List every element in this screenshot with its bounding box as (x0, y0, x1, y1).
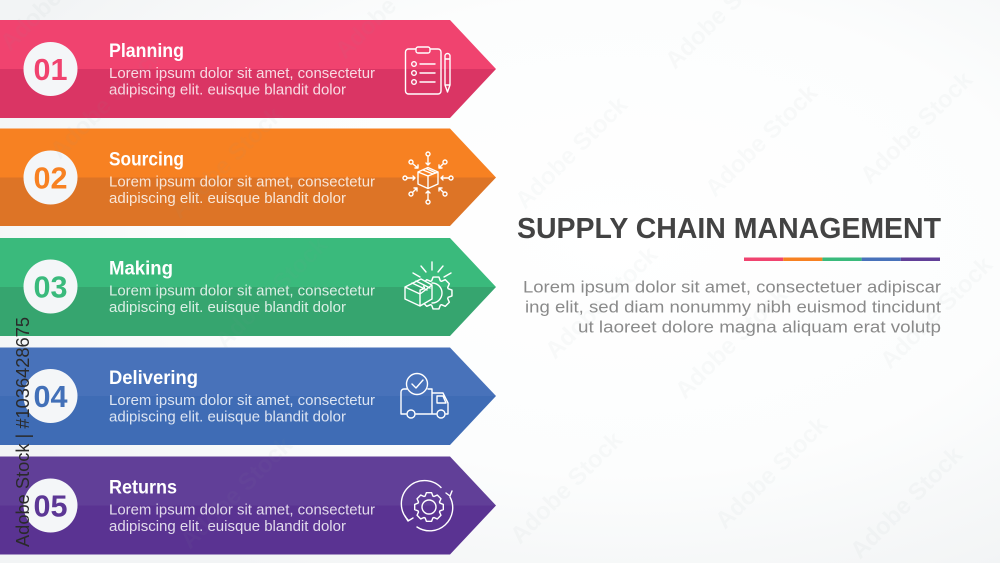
icon: delivery truck with check (401, 374, 448, 418)
text block: planning: Lorem ipsum dolor sit amet, consectetur (109, 66, 375, 82)
number badge 03: 03 (34, 270, 68, 304)
number badge 01 (24, 42, 78, 96)
text block: returns: adipiscing elit. euisque blandit dolor (109, 519, 346, 535)
number badge 05: 05 (34, 488, 68, 524)
number badge 02: 02 (34, 160, 68, 196)
text block: planning (109, 66, 375, 98)
panel: step 5 returns (0, 456, 496, 554)
watermark: adobe stock: Adobe Stock (175, 431, 298, 554)
number badge 02 (24, 150, 78, 204)
text block: making: Lorem ipsum dolor sit amet, consectetur (109, 284, 375, 300)
number badge 04 (24, 369, 78, 423)
watermark: adobe stock: Adobe Stock (700, 79, 823, 202)
number badge 04: 04 (34, 379, 68, 414)
heading: delivering: Delivering (109, 368, 198, 389)
watermark: adobe stock: Adobe Stock (710, 411, 833, 534)
text block: description: ut laoreet dolore magna aliquam erat volutp (578, 318, 941, 336)
number badge 01: 01 (34, 52, 68, 87)
watermark: adobe stock: Adobe Stock (45, 41, 168, 164)
multicolour divider (744, 258, 940, 261)
panel: step 1 planning (0, 20, 496, 118)
watermark: adobe stock: Adobe Stock (510, 91, 633, 214)
watermark: adobe stock: Adobe Stock (875, 251, 998, 374)
text block: description: Lorem ipsum dolor sit amet, consectetuer adipiscar (523, 278, 941, 296)
text block: making: adipiscing elit. euisque blandit dolor (109, 300, 346, 316)
number badge 03 (24, 260, 78, 314)
text block: making (109, 284, 375, 316)
heading: sourcing: Sourcing (109, 150, 184, 170)
text block: delivering: adipiscing elit. euisque blandit dolor (109, 410, 346, 426)
watermark: adobe stock: Adobe Stock (670, 281, 793, 404)
heading: making: Making (109, 258, 173, 280)
text block: returns (109, 502, 375, 535)
text block: description (523, 278, 941, 336)
watermark: adobe stock: Adobe Stock (505, 426, 628, 549)
text block: sourcing: adipiscing elit. euisque blandit dolor (109, 191, 346, 207)
watermark: adobe stock: Adobe Stock (540, 241, 663, 364)
panel: step 4 delivering (0, 348, 496, 445)
text block: description: ing elit, sed diam nonummy nibh euismod tincidunt (525, 298, 941, 316)
text block: sourcing (109, 174, 375, 207)
watermark: adobe stock: Adobe Stock (210, 231, 333, 354)
text block: sourcing: Lorem ipsum dolor sit amet, consectetur (109, 174, 375, 190)
text block: planning: adipiscing elit. euisque blandit dolor (109, 82, 346, 98)
heading: returns: Returns (109, 478, 177, 498)
heading: planning: Planning (109, 41, 184, 62)
panel: step 3 making (0, 238, 496, 336)
panel: step 2 sourcing (0, 128, 496, 226)
text block: delivering: Lorem ipsum dolor sit amet, consectetur (109, 393, 375, 409)
number badge 05 (24, 478, 78, 532)
icon: package network (403, 152, 453, 204)
icon: cycle gear (401, 481, 453, 531)
icon: clipboard and pencil (406, 47, 450, 94)
title: SUPPLY CHAIN MANAGEMENT (517, 213, 941, 245)
watermark: stock id: Adobe Stock | #1036428675 (12, 317, 33, 547)
watermark: adobe stock: Adobe Stock (855, 66, 978, 189)
watermark: adobe stock: Adobe Stock (165, 101, 288, 224)
watermark: adobe stock: Adobe Stock (845, 441, 968, 563)
text block: returns: Lorem ipsum dolor sit amet, consectetur (109, 502, 375, 518)
text block: delivering (109, 393, 375, 426)
icon: package and gear (405, 262, 452, 309)
